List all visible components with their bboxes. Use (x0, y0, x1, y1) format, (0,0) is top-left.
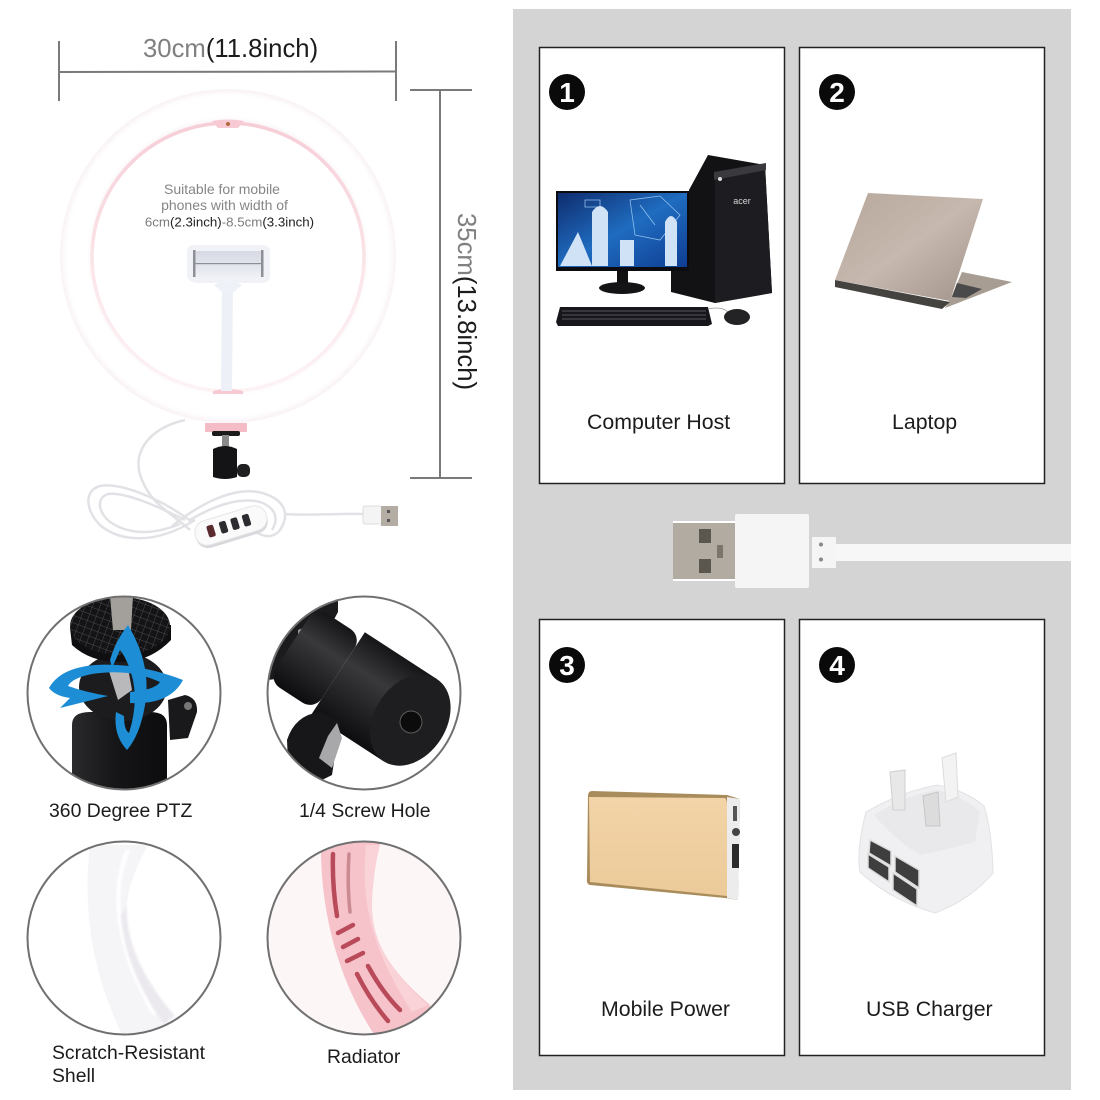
phone fit note (145, 181, 314, 230)
laptop illustration (835, 193, 1012, 309)
detail: 360 degree PTZ (28, 596, 220, 800)
card 2: laptop (800, 48, 1044, 484)
badge 2: 2 (829, 77, 845, 108)
label: Scratch-Resistant Shell: Scratch-Resistant (52, 1042, 206, 1064)
power cord (88, 420, 364, 538)
badge 4: 4 (829, 650, 845, 681)
badge 3 (549, 647, 585, 683)
label: Scratch-Resistant Shell: Shell (52, 1065, 95, 1087)
label: Laptop: Laptop (892, 410, 957, 434)
badge 2 (819, 74, 855, 110)
ball head mount (205, 423, 250, 479)
phone fit note: phones with width of (161, 197, 288, 213)
label: Scratch-Resistant Shell (52, 1042, 206, 1087)
card 3: mobile power (540, 620, 784, 1056)
ring light (60, 89, 396, 423)
card 1: computer host (540, 48, 784, 484)
panel: ring light product view (59, 35, 480, 551)
badge 3: 3 (559, 650, 575, 681)
width dimension line (59, 41, 396, 101)
panel: compatible power sources (513, 9, 1071, 1090)
badge 1: 1 (559, 77, 575, 108)
computer illustration: acer (733, 196, 751, 206)
power bank illustration (587, 791, 740, 900)
UK plug charger illustration (859, 753, 993, 913)
label: Mobile Power: Mobile Power (601, 997, 730, 1021)
phone fit note: 6cm(2.3inch)-8.5cm(3.3inch) (145, 214, 314, 230)
inline controller (192, 503, 271, 551)
label: 1/4 Screw Hole: 1/4 Screw Hole (299, 800, 430, 822)
detail: radiator (266, 840, 462, 1036)
label: USB Charger: USB Charger (866, 997, 993, 1021)
USB cable connector (673, 514, 1071, 588)
label: Computer Host: Computer Host (587, 410, 730, 434)
width label: 30cm(11.8inch) (143, 35, 318, 63)
card 4: USB charger (800, 620, 1044, 1056)
height dimension line (410, 90, 472, 478)
label: Radiator: Radiator (327, 1046, 401, 1068)
phone holder with gooseneck (187, 245, 270, 391)
height label: 35cm (13.8inch) (452, 213, 480, 390)
phone fit note: Suitable for mobile (164, 181, 280, 197)
label: 360 Degree PTZ: 360 Degree PTZ (49, 800, 193, 822)
computer illustration (556, 155, 772, 326)
badge 4 (819, 647, 855, 683)
detail: scratch-resistant shell (28, 842, 220, 1036)
USB plug small (363, 506, 398, 526)
badge 1 (549, 74, 585, 110)
detail: 1/4 screw hole (265, 596, 467, 790)
